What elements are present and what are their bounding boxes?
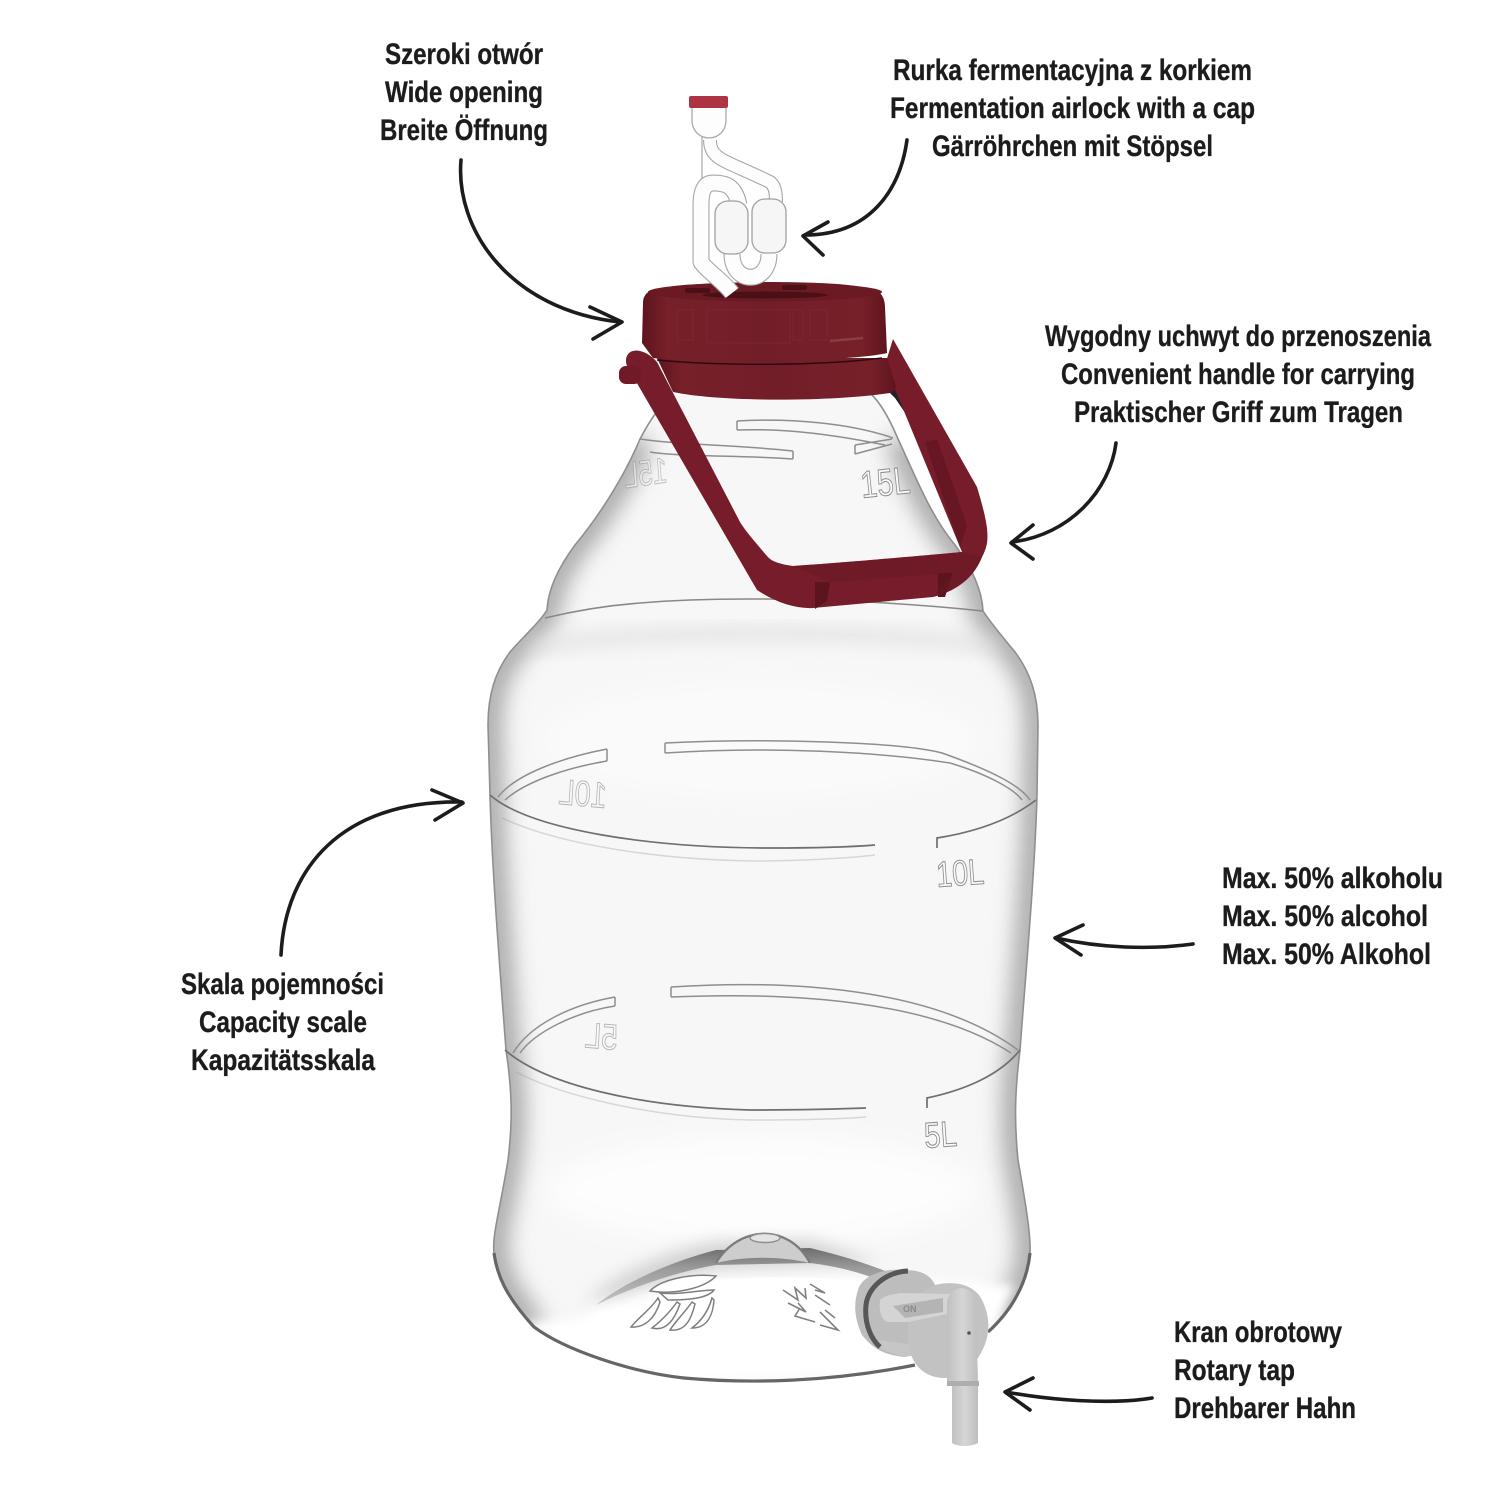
label: capacity scale: Kapazitätsskala [191, 1044, 375, 1077]
cap slots [685, 288, 710, 293]
shoulder shading band [552, 625, 974, 651]
cap top [648, 282, 882, 302]
airlock bulbs [715, 201, 748, 254]
neck rings [640, 420, 893, 459]
label: fermentation airlock: Rurka fermentacyjna z korkiem [893, 54, 1252, 87]
dark handle shadow [882, 372, 930, 442]
capacity mark: 10L front [937, 800, 1036, 848]
airlock U trap [732, 254, 769, 277]
capacity mark: 5L front [927, 1050, 1020, 1108]
airlock stopper [689, 96, 728, 108]
label: carrying handle [1045, 320, 1431, 429]
cap collar [657, 358, 896, 400]
airlock [689, 96, 786, 293]
bottle body shading [488, 413, 1038, 1329]
label: wide opening: Wide opening [385, 76, 543, 109]
handle grip recesses [815, 582, 830, 609]
arrow: capacity scale [281, 790, 463, 955]
arrow: carrying handle [1011, 443, 1116, 559]
glass bottle [480, 390, 1050, 1390]
shoulder line [545, 599, 983, 618]
capacity mark: 10L rear left [498, 749, 607, 800]
label: wide opening: Szeroki otwór [385, 38, 543, 71]
bottle outline [488, 395, 1038, 1253]
tap lever [880, 1293, 952, 1322]
airlock loop tube [701, 183, 739, 293]
label: rotary tap: Kran obrotowy [1174, 1316, 1342, 1349]
grooves [490, 795, 875, 848]
capacity mark: 5L rear left [513, 997, 615, 1053]
tap [855, 1270, 988, 1446]
label: fermentation airlock [890, 54, 1255, 163]
label: rotary tap [1174, 1316, 1356, 1425]
handle arm and grip [626, 339, 987, 608]
label: carrying handle: Praktischer Griff zum Tragen [1074, 396, 1403, 429]
cap ribs and panels [677, 310, 827, 343]
airlock S tube [710, 140, 776, 202]
label: rotary tap: Drehbarer Hahn [1174, 1392, 1356, 1425]
label: fermentation airlock: Fermentation airlock with a cap [890, 92, 1255, 125]
tap nut [855, 1270, 935, 1357]
cap side [642, 282, 887, 361]
arrow: rotary tap [1005, 1378, 1152, 1410]
handle pin [619, 366, 641, 384]
capacity label: 15L rear: 15L [623, 450, 669, 496]
tap body [947, 1288, 978, 1383]
arrow: max alcohol [1055, 925, 1193, 955]
arrow: fermentation airlock [803, 140, 907, 255]
label: max alcohol: Max. 50% alkoholu [1222, 862, 1443, 895]
airlock bulb top [692, 107, 726, 138]
cap gap line [657, 358, 882, 364]
base white floor [531, 1280, 1018, 1338]
base embossed logo: text [783, 1284, 838, 1330]
capacity mark: 5L rear [671, 985, 1018, 1053]
base band and dome [596, 1234, 888, 1305]
handle grip shading [793, 552, 982, 597]
capacity label: 10L rear: 10L [558, 771, 608, 816]
tap lever label: ON [903, 1304, 916, 1314]
handle [619, 339, 987, 609]
label: fermentation airlock: Gärröhrchen mit Stöpsel [932, 130, 1213, 163]
handle arm translucent shade [925, 439, 967, 548]
label: capacity scale [181, 968, 384, 1077]
capacity label: 15L front: 15L [859, 460, 912, 507]
label: rotary tap: Rotary tap [1174, 1354, 1295, 1387]
cap opening [702, 292, 828, 298]
capacity mark: 10L rear [665, 741, 1030, 800]
label: max alcohol: Max. 50% Alkohol [1222, 938, 1431, 971]
base embossed logo: leaves [631, 1275, 716, 1330]
tap gasket [866, 1271, 908, 1347]
tap spout [952, 1385, 978, 1446]
tap back disc [908, 1283, 988, 1378]
label: wide opening: Breite Öffnung [380, 114, 548, 147]
capacity label: 5L rear: 5L [584, 1014, 619, 1058]
label: carrying handle: Convenient handle for carrying [1061, 358, 1415, 391]
airlock left tube line [701, 137, 703, 185]
label: max alcohol: Max. 50% alcohol [1222, 900, 1428, 933]
label: wide opening [380, 38, 548, 147]
base rim [494, 1253, 1030, 1381]
capacity label: 5L front: 5L [923, 1113, 958, 1156]
arrow: wide opening [461, 160, 622, 339]
label: capacity scale: Capacity scale [199, 1006, 367, 1039]
label: max alcohol [1222, 862, 1443, 971]
cap [642, 282, 896, 400]
base band shadow [585, 1240, 880, 1300]
capacity label: 10L front: 10L [935, 851, 985, 895]
label: capacity scale: Skala pojemności [181, 968, 384, 1001]
